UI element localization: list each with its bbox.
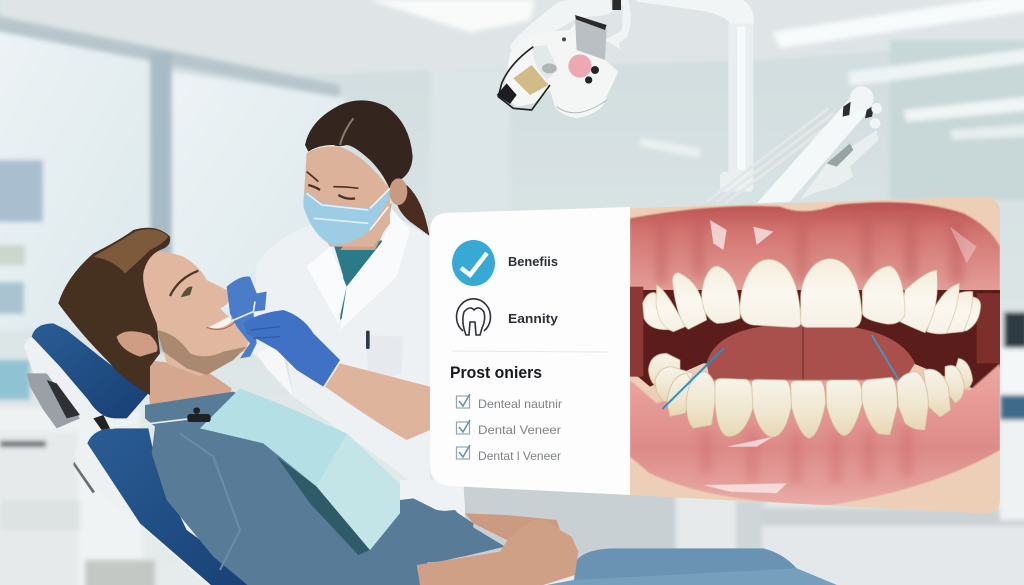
- mouth interior: [630, 290, 1000, 390]
- neck: [340, 203, 392, 250]
- gum highlights: [703, 220, 977, 493]
- beard: [157, 330, 247, 375]
- floor units right: [460, 480, 680, 560]
- hair parting: [340, 118, 353, 145]
- ear: [389, 178, 407, 205]
- right wall panel: [890, 40, 1024, 200]
- brows and eyes: [307, 172, 358, 199]
- hair: [305, 100, 413, 190]
- right glove: [243, 310, 340, 387]
- checklist: [456, 394, 562, 463]
- resting hand: [417, 519, 578, 585]
- lower gum: [630, 363, 1000, 505]
- dental tool: [230, 302, 255, 322]
- neck: [147, 360, 232, 407]
- dentist head: [303, 100, 429, 250]
- panel heading: Prost oniers: [450, 363, 542, 382]
- paper bib: [200, 388, 413, 550]
- sleeve near patient: [257, 343, 293, 397]
- panel divider: [452, 351, 608, 352]
- left counter and cabinets: [0, 408, 140, 438]
- chair headrest: [24, 323, 148, 430]
- dentist forearm: [325, 363, 430, 440]
- wall right of window: [430, 70, 510, 270]
- gum shading: [654, 227, 966, 286]
- window right: [172, 72, 345, 330]
- face: [143, 251, 248, 377]
- lamp pole: [637, 0, 754, 192]
- ceiling lights: [370, 0, 535, 32]
- overhead dental lamp: [497, 0, 754, 192]
- patient body: [110, 388, 473, 585]
- bib clip chain: [110, 407, 211, 428]
- dentist body: [253, 208, 465, 523]
- arrow: left blue pointer: [662, 348, 724, 409]
- back hand: [465, 513, 560, 543]
- ear: [117, 331, 157, 357]
- dentist gloved hands: [227, 276, 340, 387]
- face: [303, 146, 390, 247]
- arrow: right blue pointer: [872, 335, 898, 379]
- lower gum shading: [700, 427, 913, 483]
- window left: [0, 30, 150, 330]
- brow and eye: [170, 271, 198, 297]
- upper gum: [630, 202, 1000, 297]
- list item two: Dental Veneer: [478, 423, 561, 437]
- left glove: [227, 276, 267, 358]
- dentist coat hem: [400, 480, 465, 513]
- lamp head: [497, 0, 631, 118]
- smile close-up photo: [630, 190, 1003, 520]
- eannity label: Eannity: [508, 312, 558, 326]
- hair: [58, 228, 170, 395]
- white information panel: [430, 207, 630, 495]
- list item one: Denteal nautnir: [478, 397, 562, 411]
- tongue: [707, 323, 915, 382]
- dental chair: [24, 323, 270, 585]
- patient shirt: [145, 392, 473, 585]
- dental instrument arm: [707, 86, 882, 203]
- lower teeth: [648, 353, 973, 438]
- surgical mask: [303, 188, 390, 245]
- patient hand and jeans: [400, 480, 837, 585]
- dentist white coat: [253, 208, 465, 523]
- icon: blue check circle: [452, 240, 495, 286]
- smile: [208, 316, 232, 329]
- upper teeth: [643, 259, 981, 334]
- list item three: Dentat l Veneer: [478, 449, 561, 463]
- chair seat back: [73, 428, 270, 585]
- benefits label: Benefiis: [508, 255, 558, 269]
- jeans: [573, 548, 837, 585]
- ceiling: [0, 0, 1024, 75]
- shirt seam: [180, 433, 240, 570]
- ponytail: [397, 185, 429, 236]
- icon: tooth in circle: [456, 299, 490, 335]
- sleeve: [400, 498, 505, 585]
- patient head: [58, 228, 248, 407]
